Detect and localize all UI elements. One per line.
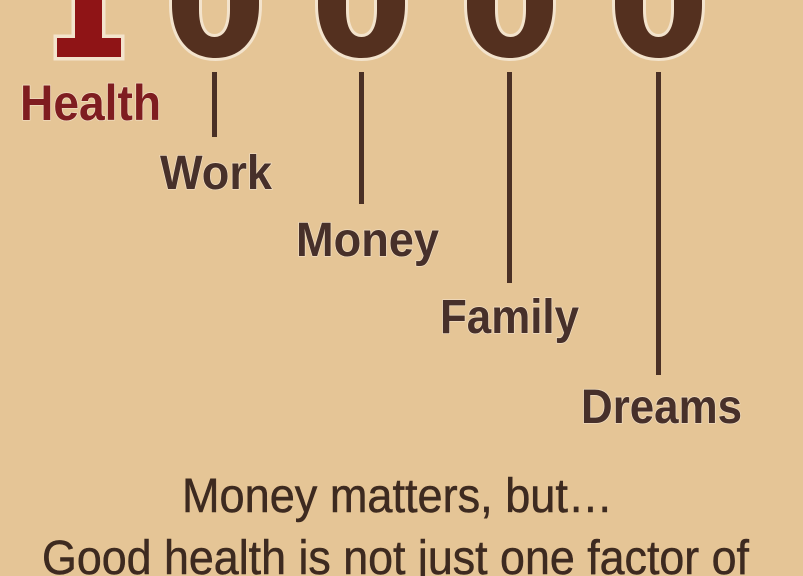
connector line: money	[359, 72, 364, 204]
connector line: dreams	[656, 72, 661, 375]
connector line: family	[507, 72, 512, 283]
label: Money: Money	[296, 214, 439, 267]
connector line: work	[212, 72, 217, 137]
first numeral 0	[172, 0, 259, 58]
label: Work: Work	[160, 147, 272, 200]
third numeral 0	[467, 0, 553, 58]
second numeral 0	[318, 0, 405, 58]
label: Health: Health	[20, 75, 161, 131]
fourth numeral 0	[615, 0, 702, 58]
message line 1: Money matters, but…	[182, 470, 613, 523]
label: Dreams: Dreams	[581, 381, 742, 434]
numeral 1 in red	[57, 0, 121, 57]
label: Family: Family	[440, 291, 579, 344]
